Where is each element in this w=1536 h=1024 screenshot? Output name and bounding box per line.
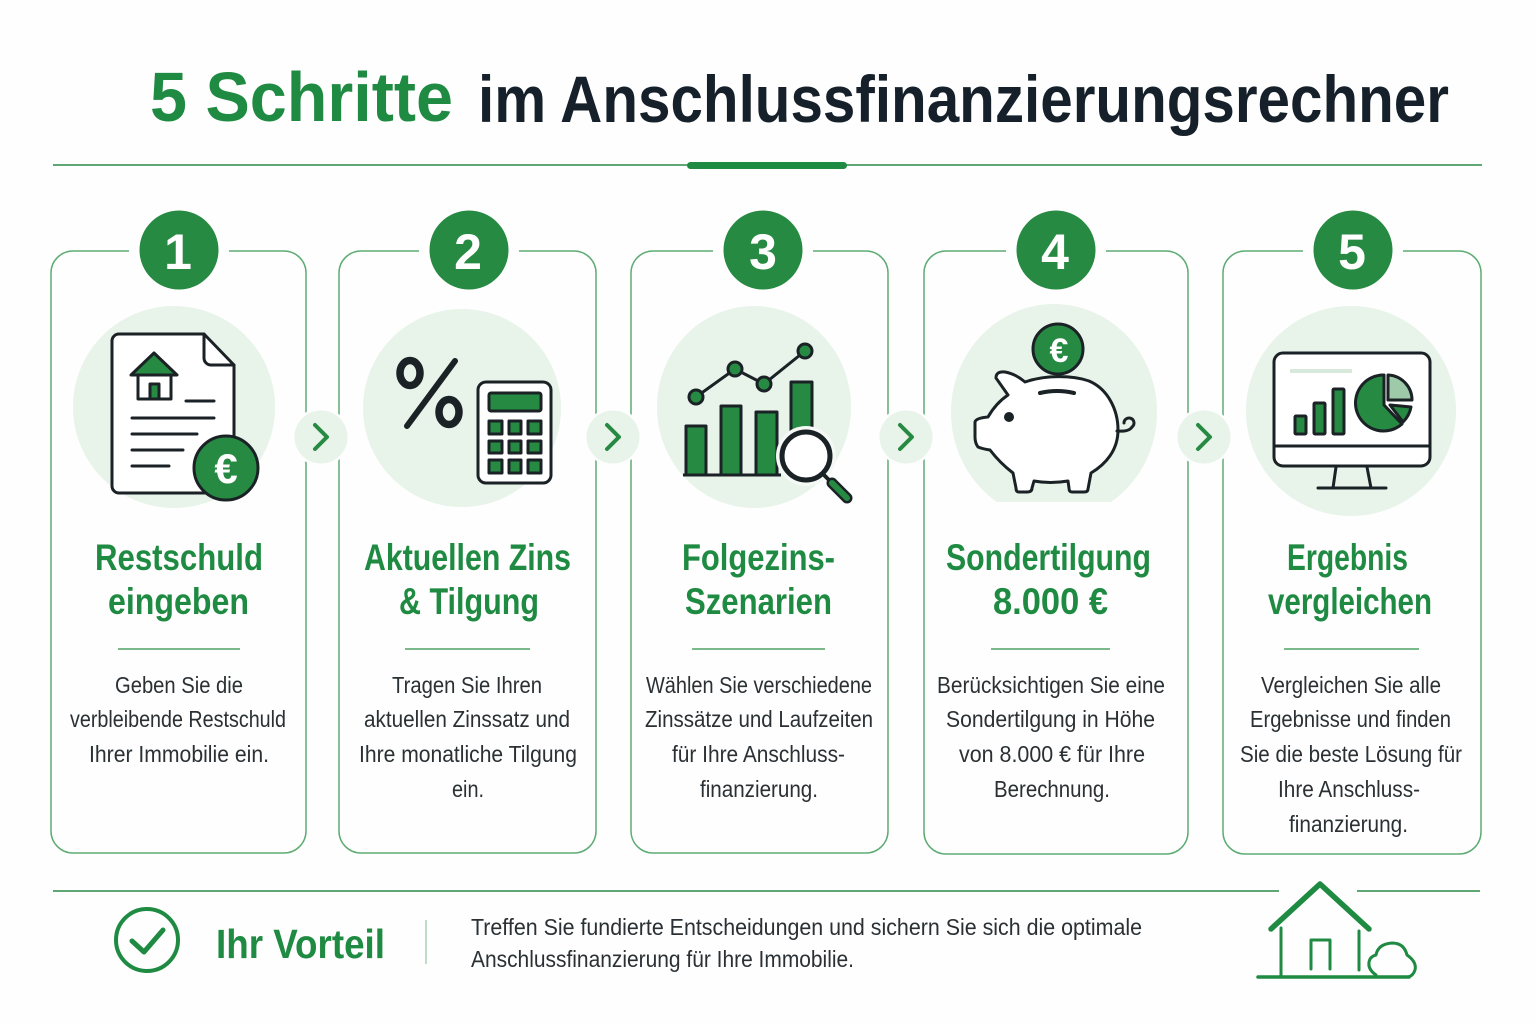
arrow 2 to 3	[584, 408, 642, 466]
footer text: Treffen Sie fundierte Entscheidungen und sichern Sie sich die optimale	[471, 914, 1142, 940]
description: Ergebnisse und finden	[1250, 706, 1451, 732]
step number 1	[140, 210, 218, 290]
icon: document with house and euro	[73, 306, 275, 508]
heading	[1268, 537, 1432, 622]
heading: eingeben	[108, 581, 249, 622]
description: für Ihre Anschluss-	[672, 741, 845, 767]
description: Sie die beste Lösung für	[1240, 741, 1462, 767]
description	[70, 672, 286, 767]
heading: Folgezins-	[682, 537, 835, 578]
heading: vergleichen	[1268, 581, 1432, 622]
icon: piggy bank with euro coin	[951, 304, 1157, 502]
step number 4: 4	[1041, 224, 1069, 280]
description: Sondertilgung in Höhe	[946, 706, 1155, 732]
heading: & Tilgung	[399, 581, 539, 622]
step number 5: 5	[1338, 224, 1366, 280]
description: Tragen Sie Ihren	[392, 672, 542, 698]
description: Zinssätze und Laufzeiten	[645, 706, 873, 732]
panel: step 3	[631, 200, 888, 853]
icon: document with house and euro: €	[214, 445, 238, 492]
description	[359, 672, 577, 802]
title	[150, 58, 1449, 136]
description: Wählen Sie verschiedene	[646, 672, 872, 698]
description: finanzierung.	[700, 776, 818, 802]
footer heading: Ihr Vorteil	[216, 921, 385, 967]
panel: step 5	[1223, 200, 1481, 854]
heading	[95, 537, 263, 622]
heading	[946, 537, 1151, 622]
footer text: Anschlussfinanzierung für Ihre Immobilie.	[471, 946, 854, 972]
arrow 1 to 2	[292, 408, 350, 466]
panel: step 1	[51, 200, 306, 853]
heading: Szenarien	[685, 581, 832, 622]
heading	[364, 537, 571, 622]
heading: Ergebnis	[1287, 537, 1408, 578]
step number 5	[1314, 210, 1392, 290]
icon: piggy bank with euro coin: €	[1050, 332, 1069, 370]
step number 3	[724, 210, 802, 290]
footer text	[471, 914, 1142, 972]
description	[1240, 672, 1462, 837]
icon: check mark	[116, 909, 178, 971]
panel: step 4	[924, 200, 1188, 854]
heading	[682, 537, 835, 622]
icon: percent and calculator	[363, 309, 561, 507]
arrow 3 to 4	[877, 408, 935, 466]
description: Vergleichen Sie alle	[1261, 672, 1441, 698]
description: Geben Sie die	[115, 672, 243, 698]
description: aktuellen Zinssatz und	[364, 706, 570, 732]
arrow 4 to 5	[1175, 408, 1233, 466]
description: verbleibende Restschuld	[70, 706, 286, 732]
heading: Sondertilgung	[946, 537, 1151, 578]
title: 5 Schritte	[150, 58, 453, 136]
heading: 8.000 €	[993, 581, 1108, 622]
step number 2	[430, 210, 508, 290]
description	[937, 672, 1165, 802]
icon: chart with magnifier	[657, 306, 851, 508]
step number 2: 2	[454, 224, 482, 280]
description: Ihre Anschluss-	[1278, 776, 1420, 802]
description: finanzierung.	[1289, 811, 1408, 837]
description	[645, 672, 873, 802]
description: von 8.000 € für Ihre	[959, 741, 1145, 767]
step number 4	[1016, 210, 1096, 290]
description: Berücksichtigen Sie eine	[937, 672, 1165, 698]
step number 1: 1	[164, 224, 192, 280]
description: Ihre monatliche Tilgung	[359, 741, 577, 767]
description: Berechnung.	[994, 776, 1110, 802]
icon: monitor with charts	[1246, 306, 1456, 516]
icon: house with bush	[1258, 884, 1415, 977]
heading: Restschuld	[95, 537, 263, 578]
panel: step 2	[339, 200, 596, 853]
description: ein.	[452, 776, 484, 802]
description: Ihrer Immobilie ein.	[89, 741, 269, 767]
heading: Aktuellen Zins	[364, 537, 571, 578]
step number 3: 3	[749, 224, 777, 280]
